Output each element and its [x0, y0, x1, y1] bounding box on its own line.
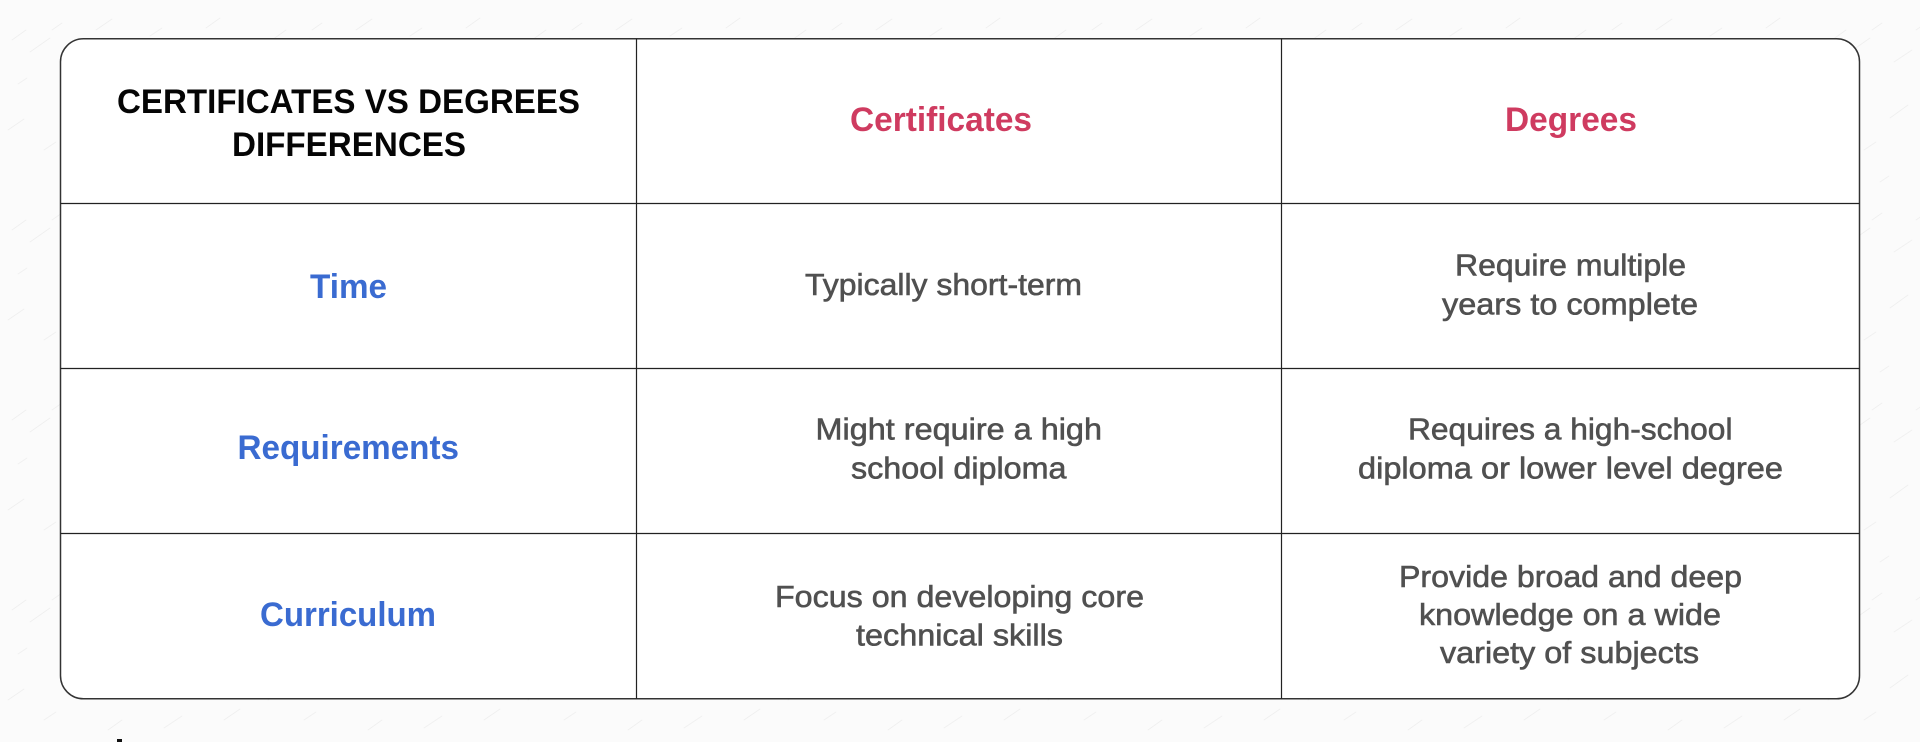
requirements: certificates: school diploma [851, 450, 1067, 486]
requirements: degrees: Requires a high-school [1408, 412, 1732, 446]
time: certificates: Typically short-term [805, 267, 1082, 302]
row heading: curriculum: Curriculum [260, 596, 436, 634]
title [117, 83, 580, 164]
curriculum: degrees: knowledge on a wide [1419, 597, 1721, 632]
cropped text stub at bottom edge [117, 739, 122, 742]
column heading: certificates: Certificates [850, 101, 1032, 139]
title: CERTIFICATES VS DEGREES [117, 83, 580, 121]
requirements: degrees: diploma or lower level degree [1358, 450, 1783, 486]
curriculum: certificates: Focus on developing core [775, 579, 1144, 614]
row heading: requirements: Requirements [238, 429, 459, 467]
title: DIFFERENCES [232, 126, 466, 164]
time: degrees: Require multiple [1455, 248, 1686, 282]
requirements: certificates [816, 412, 1102, 486]
requirements: degrees [1358, 412, 1783, 486]
time: degrees: years to complete [1442, 286, 1698, 322]
column heading: degrees: Degrees [1505, 101, 1637, 139]
curriculum: degrees [1399, 559, 1742, 670]
curriculum: degrees: variety of subjects [1440, 635, 1699, 670]
curriculum: certificates: technical skills [856, 618, 1063, 652]
time: degrees [1442, 248, 1698, 322]
requirements: certificates: Might require a high [816, 412, 1102, 446]
curriculum: certificates [775, 579, 1144, 652]
row heading: time: Time [310, 268, 387, 306]
curriculum: degrees: Provide broad and deep [1399, 559, 1742, 594]
